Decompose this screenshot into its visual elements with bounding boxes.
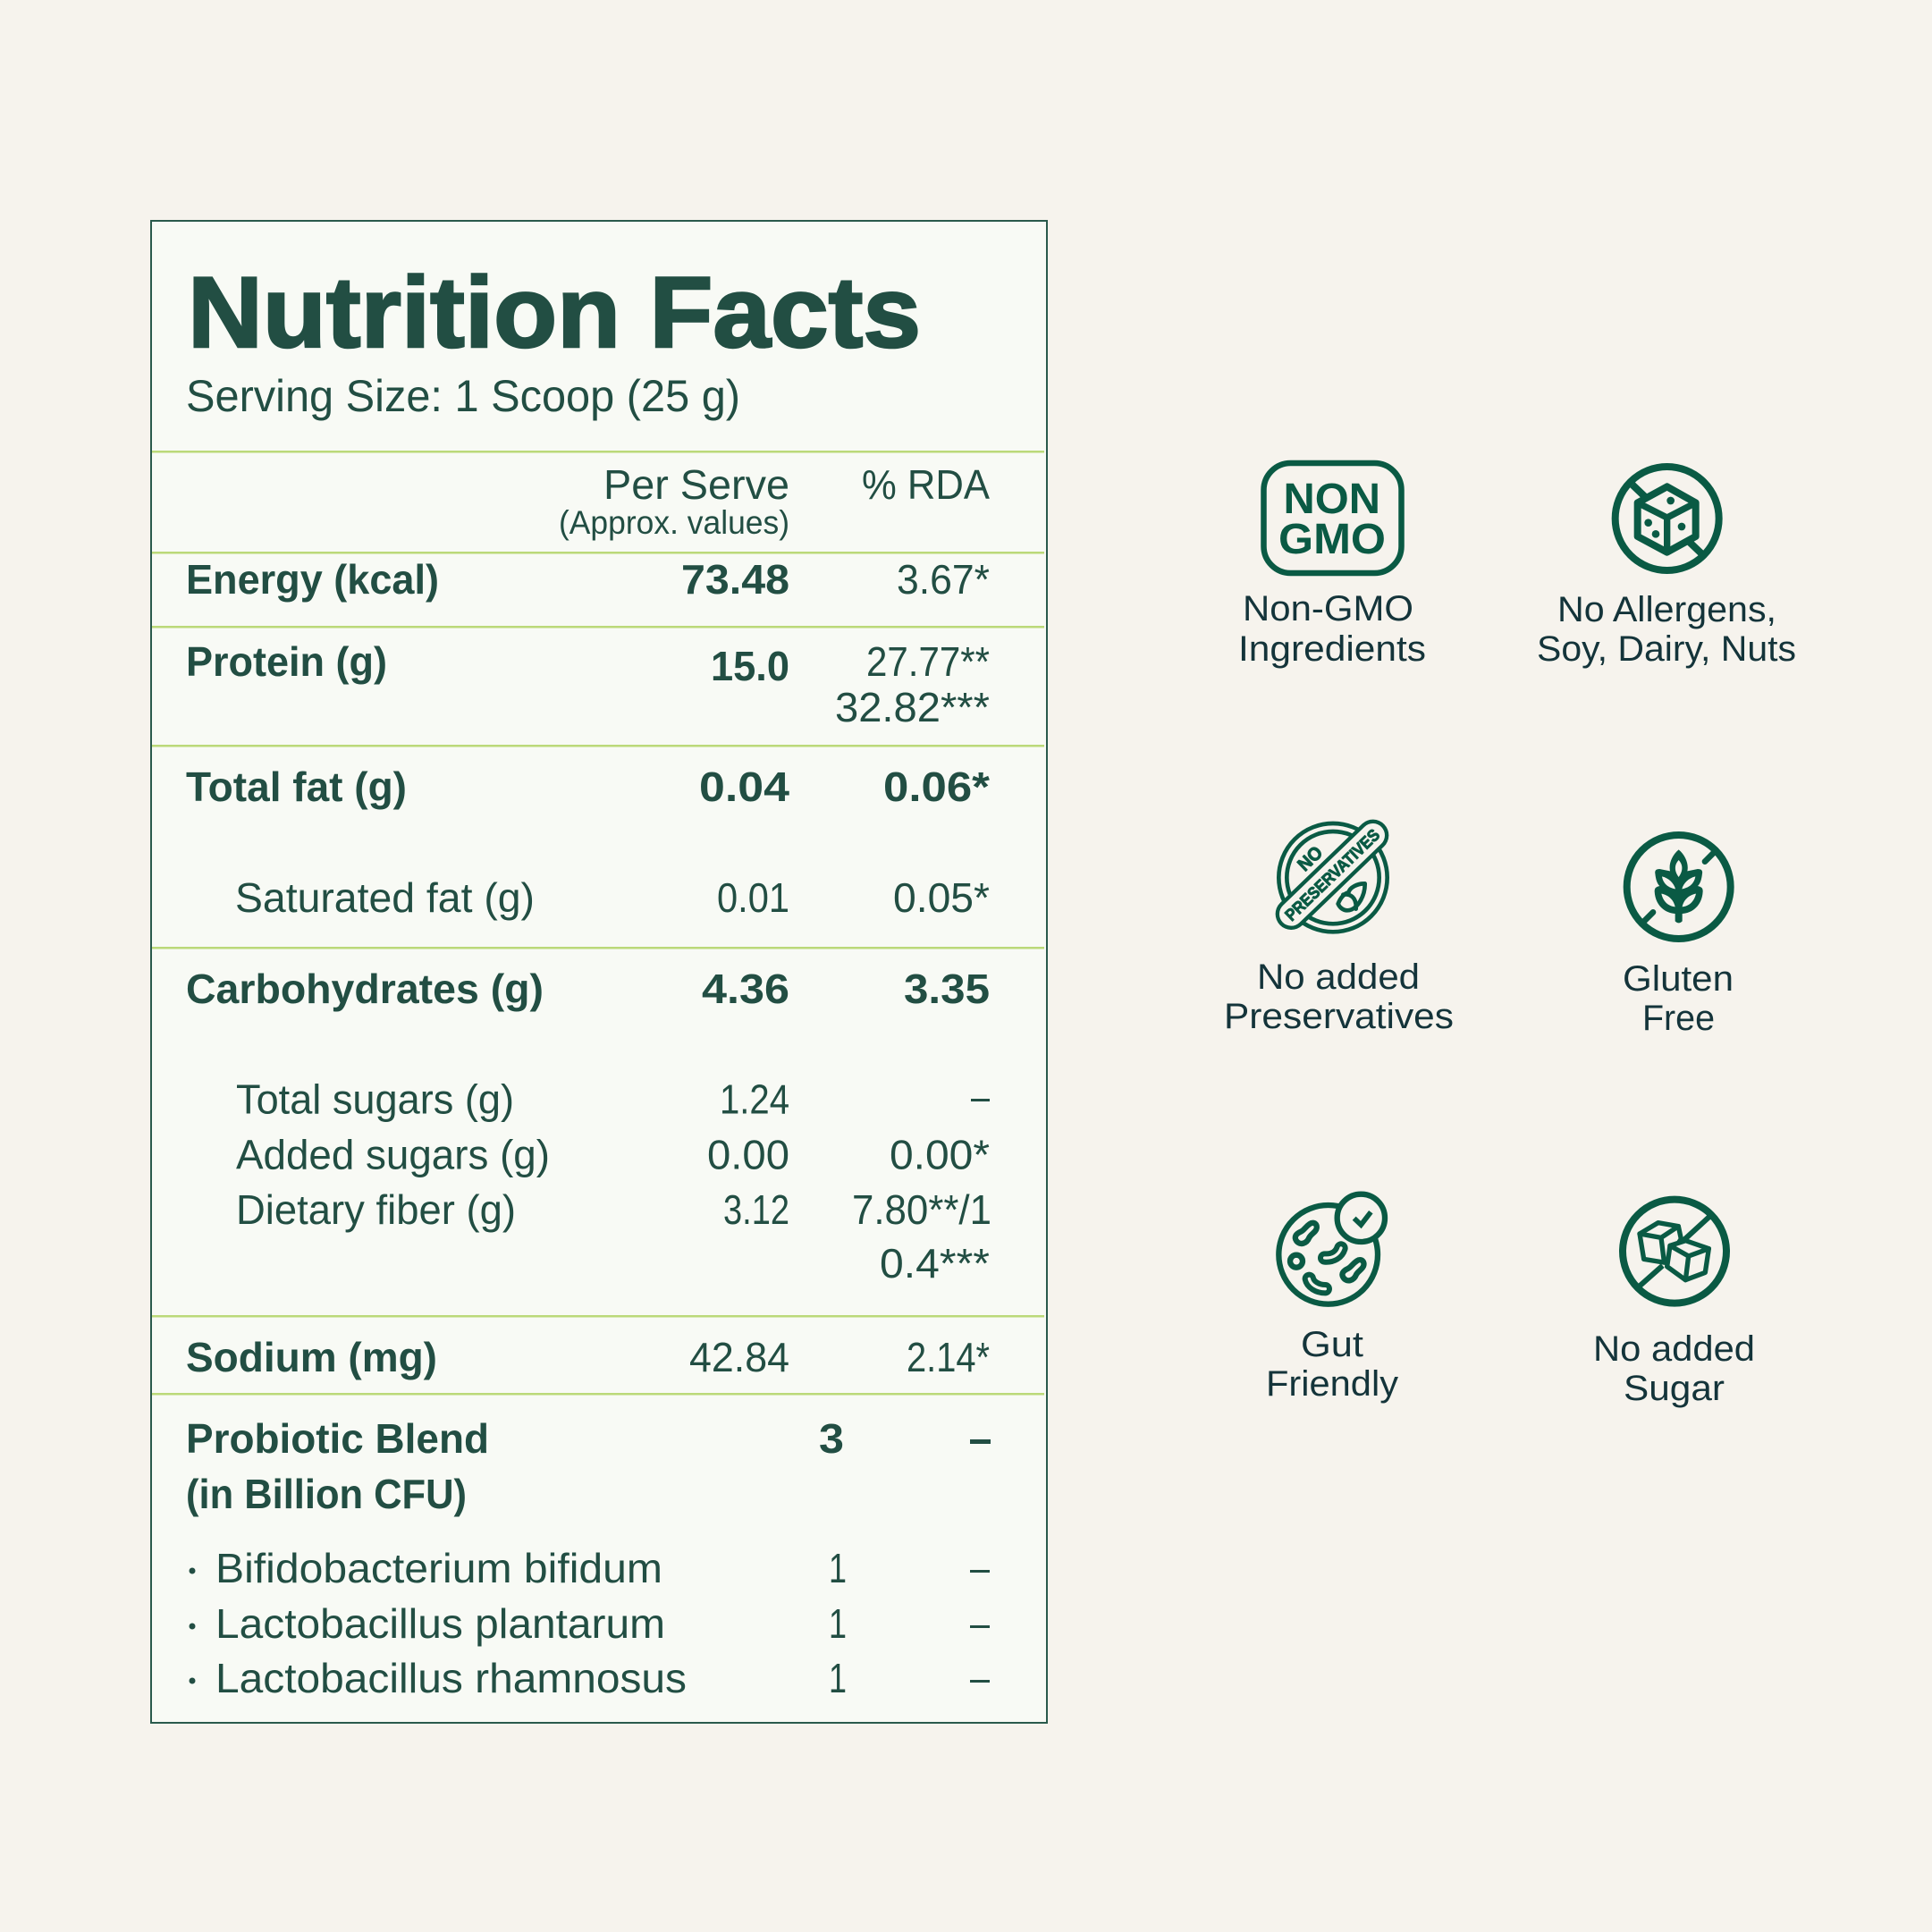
row: protein: 32.82*** [835,684,990,730]
row: added sugars [236,1132,990,1178]
row: bifidobacterium bifidum: Bifidobacterium bifidum [215,1545,662,1591]
label: gluten free [1623,959,1734,1038]
row: lactobacillus rhamnosus: Lactobacillus rhamnosus [215,1655,687,1701]
row: lactobacillus rhamnosus [190,1655,990,1701]
row: sodium: 42.84 [689,1334,789,1380]
row: added sugars: Added sugars (g) [236,1132,550,1178]
row: probiotic blend: Probiotic Blend [186,1415,489,1462]
row: saturated fat [235,874,990,921]
label: no added sugar: Sugar [1624,1369,1725,1408]
icon: non-GMO [1264,463,1402,573]
column headers: % RDA [862,461,990,508]
row: probiotic blend [186,1415,991,1517]
column headers [559,461,990,541]
row: dietary fiber [236,1186,991,1287]
row: lactobacillus plantarum [190,1600,990,1647]
icon: non-GMO: NON [1284,476,1380,523]
row: total sugars: 1.24 [720,1076,789,1123]
row: dietary fiber: 0.4*** [880,1240,990,1287]
row: probiotic blend: (in Billion CFU) [186,1471,467,1517]
icon: gluten free [1627,835,1731,939]
column headers: Per Serve [603,461,789,508]
label: no allergens [1537,590,1796,669]
row: carbohydrates: 3.35 [904,966,990,1012]
row: protein: Protein (g) [186,638,387,685]
row: total sugars: Total sugars (g) [236,1076,514,1123]
row: added sugars: 0.00 [707,1132,789,1178]
row: lactobacillus rhamnosus: 1 [829,1655,847,1701]
row: total fat: 0.04 [699,764,789,810]
row: bifidobacterium bifidum [190,1545,990,1591]
row: protein: 27.77** [866,638,990,685]
panel: nutrition facts table [151,221,1047,1723]
row: carbohydrates: Carbohydrates (g) [186,966,544,1012]
column headers: (Approx. values) [559,504,789,541]
row: dietary fiber: 7.80**/1 [852,1186,991,1233]
row: carbohydrates: 4.36 [702,966,789,1012]
row: total fat: 0.06* [883,764,990,810]
row: sodium [186,1334,990,1380]
icon: non-GMO: GMO [1278,516,1386,563]
icon: gut friendly [1278,1194,1385,1304]
row: energy: Energy (kcal) [186,556,439,603]
row: probiotic blend: 3 [819,1415,844,1462]
row: dietary fiber: 3.12 [723,1186,789,1233]
label: gut friendly [1266,1325,1398,1404]
label: gut friendly: Friendly [1266,1364,1398,1404]
row: energy [186,556,990,603]
row: total sugars [236,1076,990,1123]
label: no allergens: No Allergens, [1557,590,1776,629]
row: carbohydrates [186,966,990,1012]
label: no added sugar [1593,1329,1755,1408]
title: Nutrition Facts [188,257,921,368]
row: dietary fiber: Dietary fiber (g) [236,1186,516,1233]
icon: no added sugar [1623,1200,1726,1303]
label: no allergens: Soy, Dairy, Nuts [1537,629,1796,669]
label: gluten free: Free [1642,999,1715,1038]
icon: no preservatives: NO [1294,842,1327,875]
label: gluten free: Gluten [1623,959,1734,999]
row: energy: 73.48 [681,556,789,603]
row: total fat: Total fat (g) [186,764,407,810]
label: no preservatives: Preservatives [1224,997,1454,1036]
row: lactobacillus plantarum: Lactobacillus plantarum [215,1600,665,1647]
label: gut friendly: Gut [1301,1325,1363,1364]
icon: no preservatives: PRESERVATIVES [1281,825,1383,924]
label: non-GMO: Non-GMO [1243,589,1413,629]
label: no preservatives: No added [1257,958,1420,997]
row: protein: 15.0 [711,643,789,689]
row: saturated fat: 0.01 [717,874,789,921]
row: added sugars: 0.00* [890,1132,990,1178]
row: lactobacillus plantarum: 1 [829,1600,847,1647]
row: bifidobacterium bifidum: 1 [829,1545,847,1591]
row: sodium: Sodium (mg) [186,1334,437,1380]
icon: no allergens [1616,467,1719,570]
label: no preservatives [1224,958,1454,1036]
row: saturated fat: 0.05* [893,874,990,921]
label: non-GMO [1238,589,1426,669]
label: no added sugar: No added [1593,1329,1755,1369]
serving size: Serving Size: 1 Scoop (25 g) [186,371,740,421]
label: non-GMO: Ingredients [1238,629,1426,669]
row: energy: 3.67* [897,556,990,603]
row: sodium: 2.14* [907,1334,990,1380]
row: total fat [186,764,990,810]
row: saturated fat: Saturated fat (g) [235,874,535,921]
row: protein [186,638,990,730]
